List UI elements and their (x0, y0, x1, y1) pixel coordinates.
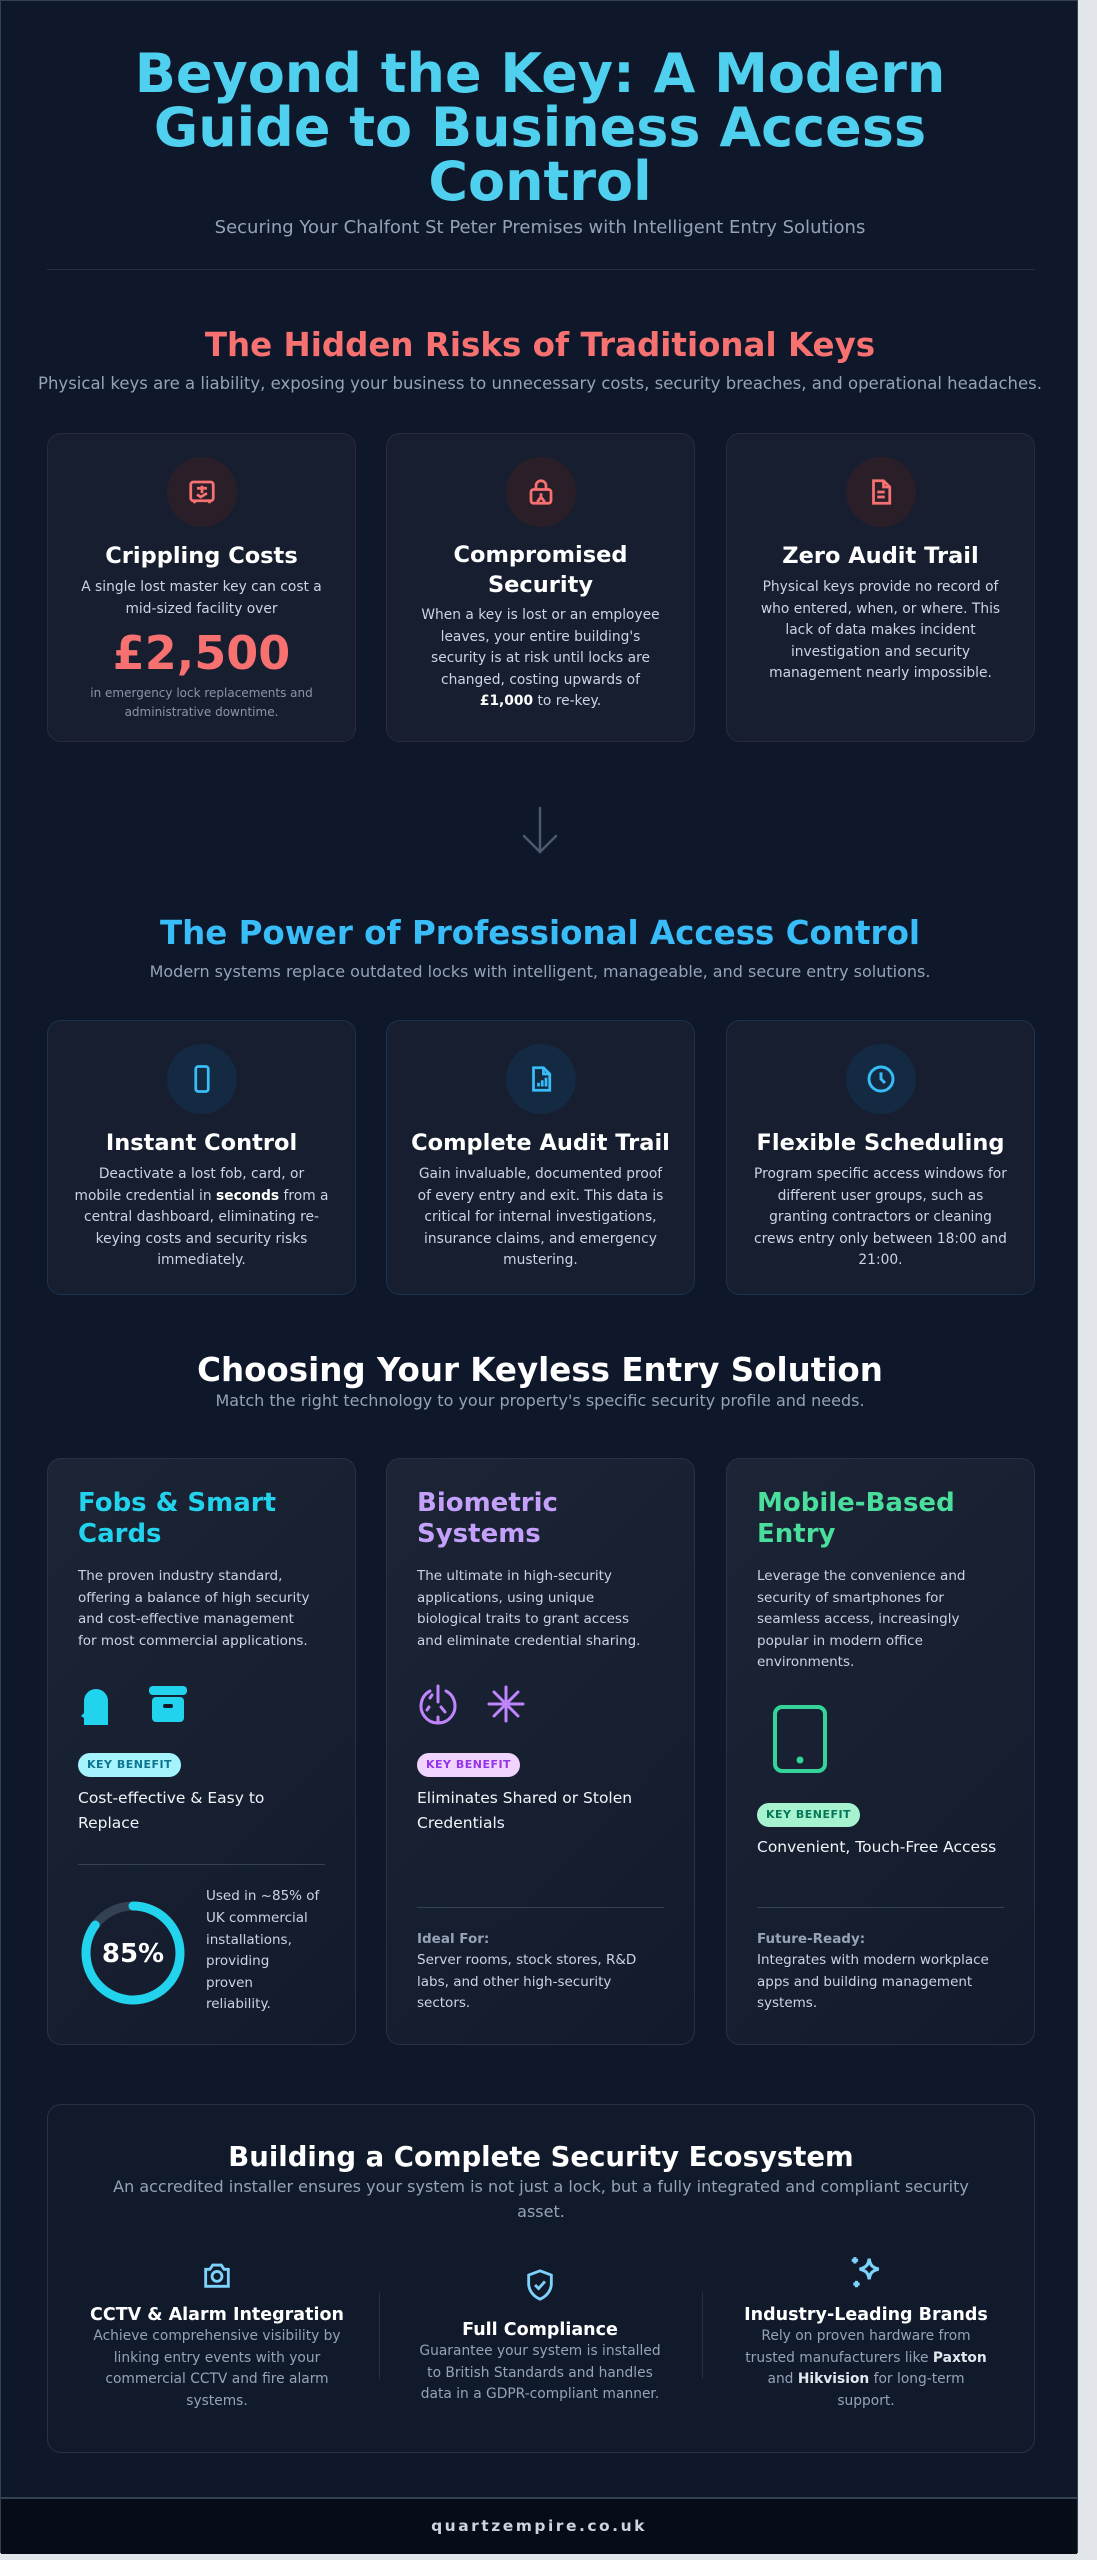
heading: Complete Audit Trail (411, 1130, 670, 1156)
title: Guide to Business Access (154, 96, 926, 159)
text: and Hikvision for long-term (767, 2371, 965, 2387)
text (81, 579, 322, 617)
text: who entered, when, or where. This (761, 601, 1000, 617)
text: intro: An accredited installer ensures your system is not just a lock, but a fully integrated and compliant security (113, 2177, 969, 2196)
heading: power of access control: The Power of Professional Access Control (160, 914, 920, 952)
icon: safe (166, 457, 236, 527)
text: benefit: Replace (78, 1814, 139, 1832)
text: Physical keys provide no record of (763, 579, 998, 595)
text: ideal for (417, 1907, 664, 2015)
text: granting contractors or cleaning (769, 1209, 992, 1225)
text: Guarantee your system is installed (419, 2343, 661, 2359)
column: cctv (90, 2264, 344, 2409)
panel: security ecosystem (47, 2104, 1035, 2453)
heading: Zero Audit Trail (782, 543, 979, 569)
text: support. (837, 2393, 895, 2409)
text: Deactivate a lost fob, card, or (99, 1166, 304, 1182)
text (754, 1166, 1007, 1268)
heading (417, 1488, 558, 1549)
icon: phone (773, 1705, 827, 1773)
badge: key benefit: KEY BENEFIT (766, 1808, 851, 1821)
icon: phone (166, 1044, 236, 1114)
text: and eliminate credential sharing. (417, 1633, 640, 1649)
icon: camera (204, 2264, 230, 2288)
text: changed, costing upwards of (441, 672, 640, 688)
text (419, 2343, 661, 2402)
stat: 85% donut: reliability. (206, 1996, 271, 2012)
heading: Entry (757, 1519, 835, 1549)
text: future-ready: Integrates with modern workplace (757, 1952, 989, 1968)
text: When a key is lost or an employee (421, 607, 660, 623)
text: benefit: Eliminates Shared or Stolen (417, 1789, 632, 1807)
text: seamless access, increasingly (757, 1611, 959, 1627)
panel: crippling costs (47, 433, 356, 742)
heading: Biometric (417, 1488, 558, 1518)
heading: Flexible Scheduling (756, 1130, 1004, 1156)
panel: instant control (47, 1020, 356, 1295)
heading: Instant Control (106, 1130, 297, 1156)
text: mobile credential in seconds from a (74, 1188, 328, 1204)
icon: report (506, 1044, 576, 1114)
text: linking entry events with your (114, 2350, 320, 2366)
column: brands (744, 2257, 988, 2409)
icons: fob and card (81, 1686, 187, 1725)
heading (78, 1488, 276, 1549)
text: investigation and security (791, 644, 970, 660)
stat: 85% donut: providing (206, 1953, 269, 1969)
text: of every entry and exit. This data is (418, 1188, 663, 1204)
text: Program specific access windows for (754, 1166, 1007, 1182)
heading: CCTV & Alarm Integration (90, 2305, 344, 2325)
subtitle: Securing Your Chalfont St Peter Premises with Intelligent Entry Solutions (215, 217, 865, 238)
text: data in a GDPR-compliant manner. (421, 2386, 659, 2402)
text: ideal for: labs, and other high-security (417, 1974, 611, 1990)
text: The proven industry standard, (78, 1568, 282, 1584)
heading: Systems (417, 1519, 541, 1549)
text: popular in modern office (757, 1633, 923, 1649)
text: commercial CCTV and fire alarm (105, 2371, 329, 2387)
title (135, 42, 945, 213)
text: applications, using unique (417, 1590, 594, 1606)
footer: quartzempire.co.uk (431, 2517, 647, 2535)
panel: zero audit trail (726, 433, 1035, 742)
badge: key benefit (757, 1803, 860, 1827)
stat: 85% donut: Used in ~85% of (206, 1888, 319, 1904)
icon: shield (527, 2269, 553, 2301)
text: hidden risks intro: Physical keys are a liability, exposing your business to unnecessary costs, security breaches, and operational headaches. (38, 374, 1042, 393)
text: benefit: Credentials (417, 1814, 505, 1832)
text: crews entry only between 18:00 and (754, 1231, 1007, 1247)
heading: crippling costs: Crippling Costs (105, 543, 298, 569)
heading: Full Compliance (462, 2320, 618, 2340)
panel: fobs & smart cards (47, 1458, 356, 2045)
badge: key benefit: KEY BENEFIT (426, 1758, 511, 1771)
text: benefit (417, 1789, 632, 1832)
heading: Fobs & Smart (78, 1488, 276, 1518)
text: intro (113, 2177, 969, 2221)
text: lack of data makes incident (785, 622, 976, 638)
text: for most commercial applications. (78, 1633, 308, 1649)
arrow: down (522, 806, 558, 854)
text: benefit (78, 1789, 264, 1832)
text: footnote: in emergency lock replacements and (90, 686, 313, 700)
heading: Building a Complete Security Ecosystem (228, 2141, 854, 2173)
text: 21:00. (858, 1252, 903, 1268)
text (418, 1166, 663, 1268)
text: immediately. (157, 1252, 246, 1268)
column: compliance (419, 2269, 661, 2402)
text: and cost-effective management (78, 1611, 294, 1627)
text: future-ready: systems. (757, 1995, 817, 2011)
text: benefit: Convenient, Touch-Free Access (757, 1838, 996, 1856)
text: benefit: Cost-effective & Easy to (78, 1789, 264, 1807)
text: Leverage the convenience and (757, 1568, 965, 1584)
text: intro: Modern systems replace outdated locks with intelligent, manageable, and secure entry solutions. (150, 962, 930, 981)
panel: complete audit trail (386, 1020, 695, 1295)
text: security of smartphones for (757, 1590, 944, 1606)
heading: Compromised (454, 542, 628, 568)
heading: hidden risks: The Hidden Risks of Traditional Keys (205, 326, 875, 364)
text: leaves, your entire building's (441, 629, 640, 645)
text: systems. (186, 2393, 248, 2409)
stat: 85% donut: UK commercial (206, 1910, 308, 1926)
text: critical for internal investigations, (424, 1209, 657, 1225)
text: £1,000 to re-key. (480, 693, 601, 709)
heading: choosing solution: Choosing Your Keyless Entry Solution (197, 1351, 883, 1389)
panel: mobile-based entry (726, 1458, 1035, 2045)
text: insurance claims, and emergency (424, 1231, 657, 1247)
text: future-ready (757, 1907, 1004, 2015)
panel: compromised security (386, 433, 695, 742)
text: environments. (757, 1654, 854, 1670)
stat: £2,500: £2,500 (113, 626, 290, 680)
badge: key benefit (417, 1753, 520, 1777)
text (761, 579, 1000, 681)
text: future-ready: apps and building management (757, 1974, 972, 1990)
text (416, 1568, 640, 1649)
heading (454, 542, 628, 598)
text: security is at risk until locks are (431, 650, 650, 666)
badge: key benefit: KEY BENEFIT (87, 1758, 172, 1771)
text: intro: Match the right technology to your property's specific security profile and needs. (215, 1391, 865, 1410)
icon: lock (506, 457, 576, 527)
text (78, 1568, 310, 1649)
text (93, 2328, 341, 2409)
footer (1, 2497, 1077, 2554)
text: ideal for: sectors. (417, 1995, 470, 2011)
text: footnote: administrative downtime. (125, 705, 278, 719)
stat: 85% donut: proven (206, 1975, 253, 1991)
text: different user groups, such as (778, 1188, 983, 1204)
text: A single lost master key can cost a (81, 579, 322, 595)
title: Beyond the Key: A Modern (135, 42, 945, 105)
icon: document (846, 457, 916, 527)
heading (757, 1488, 955, 1549)
stat: 85% donut: 85% (102, 1939, 164, 1969)
heading: Security (488, 572, 593, 598)
text: Achieve comprehensive visibility by (93, 2328, 341, 2344)
icons: fingerprint and scan (419, 1684, 524, 1724)
text: keying costs and security risks (96, 1231, 307, 1247)
heading: Industry-Leading Brands (744, 2305, 988, 2325)
text: intro: asset. (517, 2202, 565, 2221)
text (421, 607, 660, 709)
icon: sparkles (852, 2257, 880, 2288)
stat: 85% donut (78, 1864, 325, 2016)
text: trusted manufacturers like Paxton (745, 2350, 987, 2366)
text (757, 1568, 965, 1670)
text: to British Standards and handles (427, 2365, 653, 2381)
panel: flexible scheduling (726, 1020, 1035, 1295)
icon: clock (846, 1044, 916, 1114)
text (74, 1166, 328, 1268)
text: management nearly impossible. (769, 665, 992, 681)
heading: Cards (78, 1519, 162, 1549)
text: future-ready: Future-Ready: (757, 1931, 865, 1947)
text (745, 2328, 987, 2409)
text: footnote (90, 686, 313, 719)
heading: Mobile-Based (757, 1488, 955, 1518)
text: Gain invaluable, documented proof (419, 1166, 662, 1182)
text: ideal for: Ideal For: (417, 1931, 489, 1947)
panel: biometric systems (386, 1458, 695, 2045)
text: mustering. (503, 1252, 578, 1268)
stat: 85% donut: installations, (206, 1932, 292, 1948)
text: central dashboard, eliminating re- (84, 1209, 319, 1225)
text: biological traits to grant access (417, 1611, 629, 1627)
text: offering a balance of high security (78, 1590, 310, 1606)
title: Control (428, 150, 652, 213)
badge: key benefit (78, 1753, 181, 1777)
text: mid-sized facility over (125, 601, 278, 617)
text: The ultimate in high-security (417, 1568, 612, 1584)
text: Rely on proven hardware from (761, 2328, 971, 2344)
text: ideal for: Server rooms, stock stores, R&D (417, 1952, 636, 1968)
